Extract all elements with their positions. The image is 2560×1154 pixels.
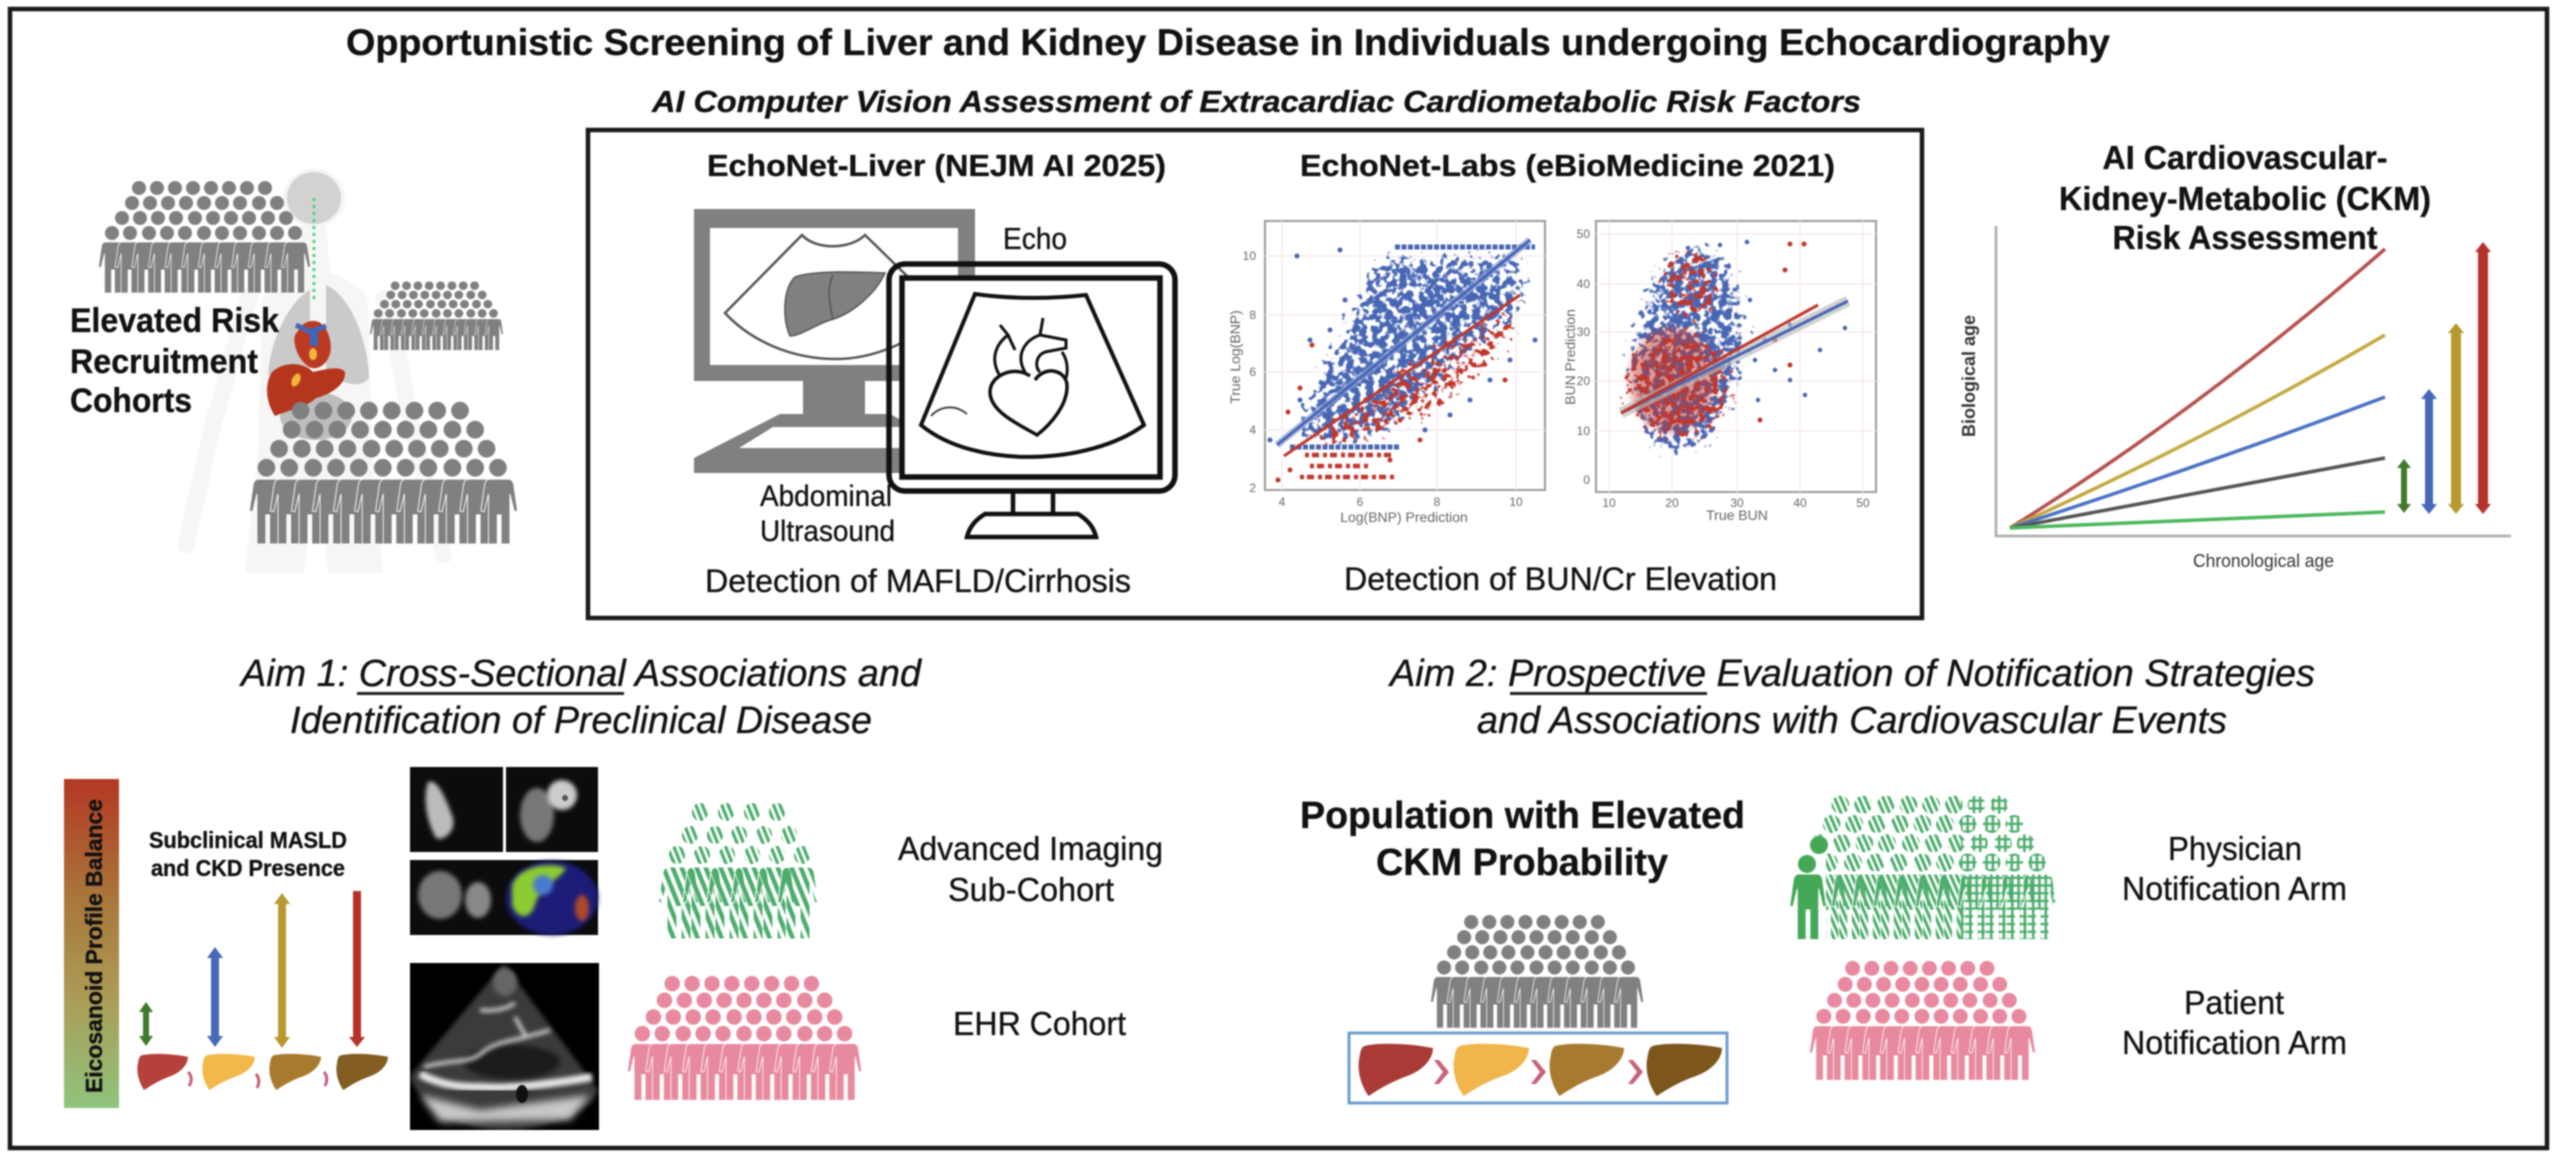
image: MRI pair: [410, 767, 598, 852]
chart: BUN scatter: 10: [1602, 496, 1616, 510]
heading: Aim 1: Aim 1: Cross-Sectional Associations and: [239, 653, 923, 695]
arrow: gold: [274, 893, 290, 1048]
chart: BNP scatter: 6: [1249, 365, 1256, 379]
heading: Aim 2: Aim 2: Prospective Evaluation of Notification Strategies: [1388, 653, 2315, 695]
heading: Aim 2: [1388, 653, 2315, 742]
crowd: population: [1430, 915, 1644, 1028]
chart: BUN scatter: 10: [1577, 424, 1590, 438]
label: chronological age: Chronological age: [2193, 551, 2334, 571]
label: elevated risk recruitment cohorts: [70, 302, 279, 420]
label: physician notification arm: [2122, 830, 2347, 907]
gradient bar: eicosanoid profile balance: Eicosanoid Profile Balance: [81, 799, 107, 1093]
chart: BNP scatter: True Log(BNP): [1227, 310, 1243, 404]
label: advanced imaging sub-cohort: Advanced Imaging: [898, 830, 1163, 867]
body silhouette: [186, 169, 444, 573]
arrow: red: [349, 891, 365, 1047]
crowd: advanced imaging sub-cohort: [659, 803, 818, 939]
chart: BUN scatter: 50: [1856, 496, 1870, 510]
crowd: EHR cohort: [627, 976, 862, 1100]
chart: BNP scatter: 10: [1509, 495, 1523, 509]
chart: BUN scatter: 40: [1793, 496, 1807, 510]
arrow: blue: [207, 947, 223, 1047]
chart: BNP scatter: 8: [1249, 308, 1256, 322]
label: patient notification arm: Notification Arm: [2122, 1024, 2347, 1061]
chart: BUN scatter: [1562, 221, 1876, 523]
label: detection of MAFLD/Cirrhosis: Detection of MAFLD/Cirrhosis: [705, 563, 1131, 599]
heading: AI CKM risk assessment: Kidney-Metabolic (CKM): [2059, 180, 2431, 217]
chart: BUN scatter: 30: [1730, 496, 1744, 510]
chart: BNP scatter: 8: [1434, 495, 1441, 509]
panel: Aim 2 content: [1300, 795, 2347, 1103]
title: Opportunistic Screening of Liver and Kidney Disease in Individuals undergoing Echocardiography: [346, 22, 2110, 63]
chart: BUN scatter: 0: [1583, 473, 1590, 487]
chart: BUN scatter: 50: [1577, 227, 1590, 241]
chart: BNP scatter: 2: [1249, 481, 1256, 495]
gradient bar: eicosanoid profile balance: [64, 779, 119, 1108]
chart: BUN scatter: 40: [1577, 277, 1590, 291]
icon: echo monitor with heart: [889, 264, 1175, 537]
heading: Aim 2: and Associations with Cardiovascular Events: [1477, 700, 2227, 742]
panel: Aim 1 content: [64, 767, 1163, 1130]
chart: BNP scatter: Log(BNP) Prediction: [1340, 509, 1468, 525]
liver progression box: [1349, 1033, 1727, 1103]
chart: BUN scatter: 20: [1577, 374, 1590, 388]
label: Echo: Echo: [1003, 221, 1067, 256]
label: patient notification arm: Patient: [2184, 984, 2284, 1021]
heading: AI CKM risk assessment: Risk Assessment: [2112, 219, 2378, 256]
label: Abdominal Ultrasound: Abdominal: [760, 480, 892, 513]
chart: BNP scatter: 4: [1249, 423, 1256, 437]
label: elevated risk recruitment cohorts: Recruitment: [70, 343, 258, 381]
label: physician notification arm: Notification Arm: [2122, 870, 2347, 907]
organs: liver: [267, 364, 345, 416]
liver progression: [137, 1054, 388, 1090]
label: Abdominal Ultrasound: [760, 480, 895, 548]
image: MRI fat map: [410, 860, 598, 935]
chart: biological vs chronological age: [1959, 226, 2511, 571]
heading: Aim 1: [239, 653, 923, 742]
chart: BUN scatter: BUN Prediction: [1562, 309, 1578, 405]
label: advanced imaging sub-cohort: Sub-Cohort: [948, 871, 1114, 908]
subtitle: AI Computer Vision Assessment of Extracardiac Cardiometabolic Risk Factors: [651, 84, 1861, 119]
crowd: physician notification arm: [1786, 796, 2056, 942]
chart: BNP scatter: 6: [1357, 495, 1364, 509]
heading: EchoNet-Liver: EchoNet-Liver (NEJM AI 2025): [707, 148, 1166, 183]
icon: abdominal ultrasound computer: [694, 209, 975, 473]
label: biological age: Biological age: [1959, 315, 1979, 437]
label: advanced imaging sub-cohort: [898, 830, 1163, 908]
crowd: patient notification arm: [1809, 961, 2035, 1080]
label: detection of BUN/Cr elevation: Detection of BUN/Cr Elevation: [1344, 561, 1777, 597]
image: echocardiogram: [410, 963, 599, 1130]
crowd: right cohort: [370, 281, 503, 350]
arrow: green: [139, 1002, 153, 1046]
label: Abdominal Ultrasound: Ultrasound: [760, 515, 895, 548]
crowd: top cohort: [98, 181, 310, 293]
arrow: gold: [2448, 323, 2464, 514]
label: subclinical MASLD and CKD presence: and CKD Presence: [151, 855, 345, 881]
label: elevated risk recruitment cohorts: Elevated Risk: [70, 302, 279, 340]
panel: elevated risk recruitment cohorts: [70, 169, 518, 573]
heading: population with elevated CKM probability: [1300, 795, 1745, 884]
crowd: bottom cohort: [249, 402, 518, 544]
label: EHR cohort: EHR Cohort: [953, 1005, 1126, 1042]
label: elevated risk recruitment cohorts: Cohorts: [70, 382, 192, 420]
heading: EchoNet-Labs: EchoNet-Labs (eBioMedicine 2021): [1300, 148, 1835, 183]
chart: BUN scatter: 30: [1577, 325, 1590, 339]
chart: BUN scatter: 20: [1665, 496, 1679, 510]
chart: BUN scatter: True BUN: [1706, 507, 1768, 523]
chart: BNP scatter: 10: [1243, 249, 1256, 263]
arrow: blue: [2421, 389, 2437, 514]
heading: population with elevated CKM probability: CKM Probability: [1376, 842, 1668, 884]
panel: central AI box: [588, 130, 1922, 618]
label: physician notification arm: Physician: [2168, 830, 2302, 867]
arrow: red: [2475, 242, 2491, 514]
heading: AI CKM risk assessment: [2059, 139, 2431, 256]
organs: heart: [294, 321, 331, 368]
chart: BNP scatter: [1227, 221, 1545, 525]
heading: AI CKM risk assessment: AI Cardiovascular-: [2102, 139, 2388, 176]
heading: Aim 1: Identification of Preclinical Disease: [290, 700, 872, 742]
label: patient notification arm: [2122, 984, 2347, 1061]
arrow: green: [2397, 459, 2411, 513]
label: subclinical MASLD and CKD presence: [149, 827, 347, 881]
label: subclinical MASLD and CKD presence: Subclinical MASLD: [149, 827, 347, 853]
chart: BNP scatter: 4: [1279, 495, 1286, 509]
heading: population with elevated CKM probability: Population with Elevated: [1300, 795, 1745, 837]
